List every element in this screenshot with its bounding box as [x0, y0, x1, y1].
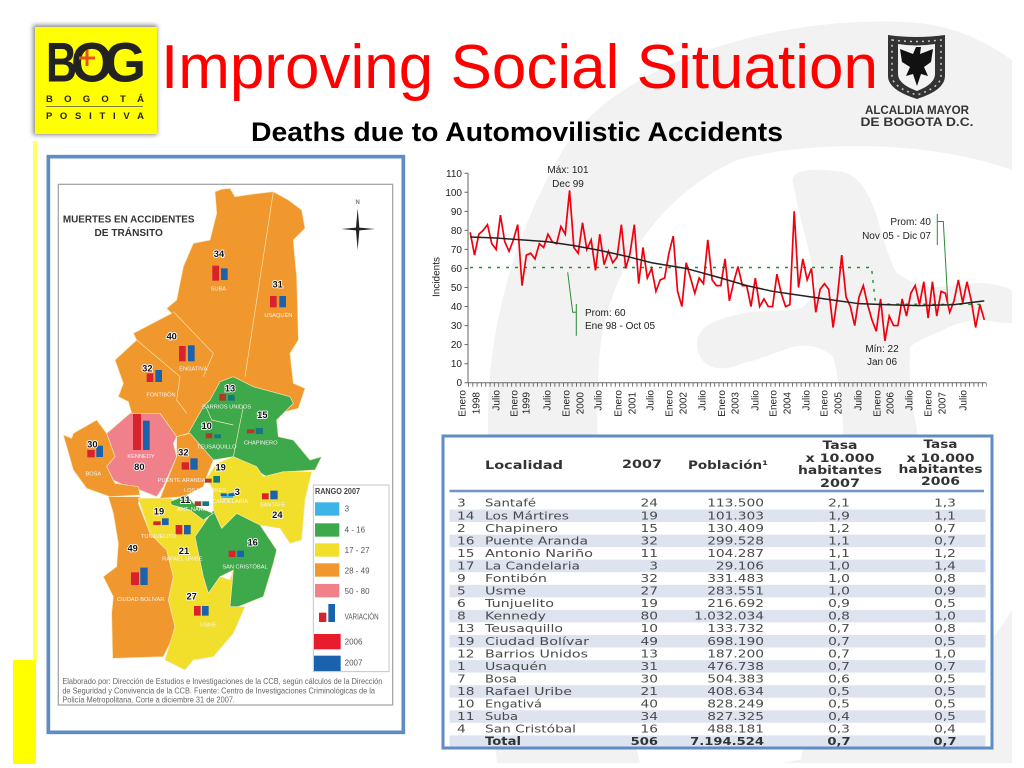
Usaquén: USAQUÉN: [264, 312, 292, 319]
x axis and labels: Julio: [802, 390, 812, 411]
Barrios Unidos: [202, 383, 251, 411]
table rows: ID: 1: [457, 659, 466, 673]
map title: [63, 214, 195, 239]
Engativá: ENGATIVÁ: [179, 366, 208, 373]
table header: x 10.000: [906, 451, 974, 465]
callout: Prom 60: Ene 98 - Oct 05: [585, 321, 655, 332]
Los Mártires: [184, 463, 226, 494]
Antonio Nariño: ANT. NARIÑO: [177, 506, 214, 513]
map legend: 4 - 16: [345, 526, 366, 535]
table header: 2007: [622, 457, 662, 471]
table column: rate 2007: 0,8: [828, 609, 850, 622]
La Candelaria: [212, 487, 248, 505]
table column: rate 2006: 0,5: [934, 596, 956, 610]
Santafé: SANTAFÉ: [260, 501, 286, 508]
x axis and labels: Enero: [614, 390, 624, 417]
left yellow accent strip: [13, 141, 37, 764]
table column: rate 2007: 0,3: [828, 722, 850, 735]
table rows: ID: 12: [457, 647, 474, 660]
Puente Aranda: 32: [178, 448, 189, 458]
table header: x 10.000: [806, 451, 874, 465]
map legend: RANGO 2007: [315, 487, 360, 496]
Engativá: [166, 332, 208, 373]
table column: population: 828.249: [707, 697, 764, 710]
table header: Tasa: [924, 437, 958, 451]
table column: 2007: 32: [641, 571, 658, 585]
table header: [450, 437, 984, 491]
table rows: ID: 15: [457, 546, 474, 560]
Tunjuelito: [141, 506, 176, 540]
Ciudad Bolívar: [117, 543, 164, 603]
table column: 2007: 80: [641, 609, 658, 622]
Tunjuelito: TUNJUELITO: [141, 534, 176, 540]
table rows: ID: 18: [457, 684, 475, 698]
table column: rate 2006: [933, 496, 957, 748]
Usaquén: 31: [272, 279, 283, 289]
Ciudad Bolívar: CIUDAD BOLÍVAR: [117, 596, 164, 603]
table rows: ID: 19: [457, 634, 475, 647]
map of Bogotá localities: [63, 188, 322, 670]
table column: rate 2006: 1,3: [934, 496, 956, 509]
table rows: localities: Santafé: [485, 497, 536, 510]
table column: rate 2006: 0,8: [934, 622, 956, 635]
icon: Bogotá coat of arms: [888, 35, 945, 99]
y axis and labels: 50: [451, 283, 462, 294]
table column: rate 2006: 1,1: [934, 509, 956, 522]
table column: population: 504.383: [707, 672, 764, 685]
table column: rate 2006: 0,7: [934, 534, 956, 547]
table column: 2007: 19: [641, 509, 658, 522]
table column: rate 2007: 0,5: [828, 684, 850, 698]
Los Mártires: 19: [215, 463, 226, 473]
Suba: 34: [214, 249, 225, 259]
table header: Población¹: [688, 458, 768, 472]
Rafael Uribe: RAFAEL URIBE: [162, 556, 203, 562]
table column: rate 2007: 0,6: [828, 672, 850, 685]
table column: rate 2007: 0,7: [828, 634, 850, 647]
table column: rate 2007: 1,1: [828, 546, 850, 560]
table rows: ID: 14: [457, 509, 475, 522]
x axis and labels: Julio: [698, 390, 708, 411]
table column: 2007: 32: [641, 534, 658, 547]
panel: locality table: [443, 436, 992, 748]
Chapinero: 15: [257, 410, 268, 420]
table column: rate 2006: 0,5: [934, 672, 956, 685]
Bosa: BOSA: [85, 471, 101, 477]
x axis and labels: 2002: [678, 392, 690, 414]
x axis and labels: 2000: [576, 392, 586, 414]
table header: 2006: [921, 474, 960, 488]
table column: rate 2007: 1,0: [828, 571, 850, 585]
table rows: ID: 17: [457, 559, 474, 572]
panel: traffic deaths map: [48, 157, 403, 732]
line chart: monthly incidents 1998-2007: [432, 165, 987, 417]
table rows: ID: 13: [457, 622, 474, 635]
table column: rate 2007: 2,1: [828, 496, 850, 509]
table column: population: 113.500: [707, 496, 764, 509]
table rows: localities: [484, 497, 593, 748]
table header: Localidad: [485, 458, 563, 472]
table column: rate 2006: 0,5: [934, 684, 956, 698]
x axis and labels: 2005: [834, 392, 844, 414]
table rows: ID: 11: [457, 709, 474, 723]
table column: rate 2007: 0,9: [828, 596, 850, 610]
Kennedy: KENNEDY: [127, 454, 155, 460]
table column: rate 2006: 1,0: [934, 609, 956, 622]
x axis and labels: 1999: [522, 392, 532, 414]
table rows: ID: 5: [457, 584, 466, 597]
map legend: 50 - 80: [345, 587, 370, 596]
y axis and labels: 10: [451, 359, 462, 370]
Alcaldía Mayor wordmark: [860, 103, 974, 129]
x axis and labels: 1998: [472, 392, 482, 414]
Fontibón: [142, 363, 176, 398]
Suba: SUBA: [211, 286, 226, 292]
Chapinero: CHAPINERO: [244, 441, 278, 447]
Suba: [211, 249, 228, 292]
table rows: ID: [457, 496, 475, 735]
table column: rate 2006: 0,8: [934, 571, 956, 585]
y axis and labels: 0: [456, 378, 462, 389]
table column: rate 2007: 1,0: [828, 584, 850, 597]
table column: 2007: 49: [641, 634, 658, 647]
table column: rate 2007: 1,1: [828, 534, 850, 547]
y axis and labels: Incidents: [432, 257, 442, 297]
table header: habitantes: [898, 462, 983, 476]
table header: 2007: [820, 476, 860, 490]
Santafé: 24: [272, 510, 283, 520]
table column: rate 2007: [827, 496, 851, 748]
table rows: localities: Kennedy: [485, 610, 547, 623]
table column: 2007: 31: [641, 659, 658, 673]
background swirl watermark: [488, 22, 1012, 763]
table column: population: 7.194.524: [690, 735, 764, 748]
map title: MUERTES EN ACCIDENTES: [63, 214, 195, 225]
locality bars and counts: [85, 249, 292, 628]
table rows: localities: Chapinero: [485, 522, 558, 535]
x axis and labels: Julio: [594, 390, 604, 411]
San Cristóbal: SAN CRISTÓBAL: [222, 564, 268, 571]
Rafael Uribe: [162, 525, 203, 562]
Tunjuelito: 19: [154, 506, 164, 516]
x axis and labels: 2006: [886, 392, 896, 414]
x axis and labels: Enero: [820, 390, 830, 417]
table rows: localities: Tunjuelito: [484, 597, 554, 610]
table column: 2007: 16: [641, 722, 658, 735]
table column: population: 133.732: [707, 622, 764, 635]
table column: population: [690, 496, 764, 748]
title: Improving Social Situation: [161, 33, 878, 102]
logo: BOG Bogotá Positiva: [33, 25, 157, 135]
map source note: Elaborado por: Dirección de Estudios e Investigaciones de la CCB, según cálculos de la Dirección: [62, 677, 382, 686]
table column: rate 2007: 1,9: [828, 509, 850, 522]
Rafael Uribe: 21: [179, 546, 189, 556]
table rows: localities: Puente Aranda: [485, 534, 588, 547]
callout: Max: Máx: 101: [547, 165, 589, 176]
table column: 2007: 506: [631, 735, 658, 748]
Teusaquillo: 10: [201, 421, 212, 431]
Kennedy: 80: [134, 462, 145, 472]
table column: rate 2006: 0,5: [934, 634, 956, 647]
table header: Tasa: [822, 438, 858, 452]
callout: Max: Dec 99: [552, 179, 584, 190]
y axis and labels: 110: [446, 169, 462, 180]
map source note: de Seguridad y Convivencia de la CCB. Fuente: Centro de Investigaciones Criminológicas de la: [62, 686, 376, 695]
table column: 2007: 24: [641, 496, 658, 509]
table column: 2007: 13: [641, 647, 658, 660]
Fontibón: 32: [142, 363, 153, 373]
table column: rate 2007: 1,2: [828, 521, 850, 534]
Barrios Unidos: BARRIOS UNIDOS: [202, 405, 251, 411]
Usme: 27: [186, 592, 197, 602]
x axis and labels: Julio: [492, 390, 502, 411]
trend line: [470, 237, 984, 306]
table rows: ID: 9: [457, 571, 466, 585]
logo: BOG Bogotá Positiva: G: [104, 30, 146, 94]
row shading: [450, 510, 986, 746]
table column: rate 2007: 0,7: [827, 735, 851, 748]
map legend: 3: [345, 505, 350, 514]
table column: population: 698.190: [707, 634, 764, 647]
map legend: 2007: [345, 658, 363, 667]
table rows: localities: Total: [485, 734, 521, 748]
x axis and labels: Enero: [664, 390, 676, 417]
callout: Prom 60: Prom: 60: [585, 308, 626, 319]
table column: rate 2006: 0,7: [933, 735, 957, 748]
table rows: ID: 3: [457, 496, 466, 509]
table rows: localities: Ciudad Bolívar: [485, 635, 590, 648]
table rows: ID: 7: [457, 672, 466, 685]
Antonio Nariño: 11: [180, 495, 190, 505]
table rows: ID: 16: [457, 534, 475, 547]
table column: 2007: 34: [641, 709, 658, 723]
callout: Min: Mín: 22: [865, 344, 899, 355]
Bosa: 30: [87, 439, 98, 449]
Alcaldía Mayor wordmark: DE BOGOTA D.C.: [860, 115, 974, 129]
Usme: USME: [200, 622, 217, 628]
logo: BOG Bogotá Positiva: B: [46, 30, 77, 94]
table column: rate 2007: 0,5: [828, 697, 850, 710]
table column: 2007: 40: [641, 697, 658, 710]
icon: compass rose: N: [355, 200, 360, 206]
period average dashed line: [470, 268, 983, 304]
table rows: localities: La Candelaria: [485, 560, 580, 572]
San Cristóbal: [222, 537, 268, 571]
table rows: localities: Antonio Nariño: [485, 547, 593, 560]
table rows: ID: 10: [457, 697, 475, 710]
Engativá: 40: [166, 332, 177, 342]
Alcaldía Mayor wordmark: ALCALDIA MAYOR: [865, 103, 969, 117]
x axis and labels: Julio: [750, 390, 762, 411]
table rows: localities: Engativá: [485, 698, 542, 710]
table column: 2007: 10: [641, 622, 658, 635]
x axis and labels: Julio: [854, 390, 864, 411]
table header: habitantes: [798, 463, 882, 477]
San Cristóbal: 16: [247, 537, 258, 547]
y axis and labels: [432, 169, 468, 389]
table column: rate 2007: 0,7: [828, 647, 850, 660]
table column: rate 2006: 0,7: [934, 521, 956, 534]
y axis and labels: 90: [451, 207, 462, 218]
table column: 2007: 11: [641, 546, 658, 560]
map source note: [62, 677, 382, 705]
Kennedy: [127, 414, 155, 472]
table column: population: 187.200: [707, 647, 764, 660]
table column: 2007: 27: [641, 584, 658, 597]
x axis and labels: Enero: [510, 390, 520, 417]
callout: Prom 40: Prom: 40: [890, 217, 931, 228]
x axis and labels: Enero: [924, 390, 934, 417]
subtitle: Deaths due to Automovilistic Accidents: [251, 117, 783, 147]
table column: rate 2006: 0,7: [934, 659, 956, 673]
callout: Min: [865, 344, 899, 368]
Teusaquillo: [197, 421, 237, 451]
map legend: 28 - 49: [345, 566, 370, 575]
table column: rate 2007: 0,7: [828, 659, 850, 673]
table rows: localities: Los Mártires: [485, 509, 569, 522]
table rows: localities: Bosa: [485, 672, 517, 685]
Teusaquillo: TEUSAQUILLO: [197, 445, 237, 451]
table column: population: 476.738: [707, 659, 764, 673]
Usme: [186, 592, 217, 628]
table rows: localities: Teusaquillo: [484, 622, 563, 635]
Fontibón: FONTIBÓN: [146, 391, 176, 398]
table column: rate 2006: 0,4: [934, 722, 956, 735]
table column: 2007: 15: [641, 521, 658, 534]
y axis and labels: 70: [451, 245, 462, 256]
table rows: localities: San Cristóbal: [485, 723, 576, 736]
table column: population: 488.181: [707, 722, 764, 735]
table column: rate 2006: 1,2: [934, 546, 956, 560]
y axis and labels: 100: [445, 188, 462, 199]
Chapinero: [244, 410, 278, 447]
table column: population: 1.032.034: [694, 609, 764, 622]
x axis and labels: Julio: [542, 390, 554, 411]
x axis and labels: Enero: [872, 390, 884, 417]
x axis and labels: [458, 383, 987, 417]
Puente Aranda: [158, 448, 206, 484]
Santafé: [260, 491, 286, 520]
table rows: ID: 8: [457, 609, 466, 622]
table column: rate 2007: 0,7: [828, 622, 850, 635]
logo: BOG Bogotá Positiva: B O G O T Á: [46, 94, 144, 105]
map legend: VARIACIÓN: [345, 612, 379, 621]
Los Mártires: LOS MÁRTIRES: [184, 487, 226, 494]
map legend: 2006: [345, 637, 363, 646]
table column: 2007: 21: [641, 684, 658, 698]
table column: rate 2006: 1,4: [934, 559, 956, 572]
x axis and labels: Julio: [958, 390, 970, 411]
table column: population: 299.528: [707, 534, 764, 547]
table column: 2007: 30: [641, 672, 658, 685]
table column: rate 2006: 0,5: [934, 709, 956, 723]
x axis and labels: 2001: [628, 392, 638, 414]
y axis and labels: 30: [451, 321, 462, 332]
logo: BOG Bogotá Positiva: O: [71, 30, 113, 94]
x axis and labels: 2004: [782, 392, 794, 414]
table column: rate 2006: 0,9: [934, 584, 956, 597]
table column: rate 2006: 0,5: [934, 697, 956, 710]
x axis and labels: 2003: [730, 392, 742, 414]
callout: Min: Jan 06: [867, 357, 897, 368]
y axis and labels: 80: [451, 226, 462, 237]
Usaquén: [264, 279, 292, 319]
x axis and labels: Enero: [562, 390, 572, 417]
callout: Prom 40: [862, 214, 948, 305]
table rows: ID: 2: [457, 521, 466, 534]
y axis and labels: 60: [451, 264, 462, 275]
x axis and labels: Enero: [717, 390, 728, 417]
table column: population: 216.692: [707, 596, 764, 610]
Bosa: [85, 439, 103, 477]
table column: population: 101.303: [707, 509, 764, 522]
table column: 2007: 3: [649, 559, 658, 572]
x axis and labels: Enero: [458, 390, 468, 417]
table column: population: 331.483: [707, 571, 764, 585]
table rows: ID: 4: [457, 722, 466, 735]
logo: BOG Bogotá Positiva: P O S I T I V A: [46, 111, 144, 122]
La Candelaria: CANDELARIA: [212, 499, 248, 505]
table column: 2007: [631, 496, 658, 748]
map legend: 17 - 27: [345, 546, 370, 555]
table column: population: 130.409: [707, 521, 764, 534]
table column: population: 29.106: [716, 559, 764, 572]
x axis and labels: Julio: [904, 390, 916, 411]
table column: population: 283.551: [707, 584, 764, 597]
La Candelaria: 3: [235, 487, 240, 497]
table rows: localities: Barrios Unidos: [485, 647, 588, 660]
Puente Aranda: PUENTE ARANDA: [158, 478, 206, 484]
table column: rate 2006: 1,0: [934, 647, 956, 660]
table rows: localities: Suba: [485, 710, 518, 723]
table rows: ID: 6: [457, 596, 466, 610]
table column: rate 2007: 0,4: [828, 709, 850, 723]
y axis and labels: 20: [451, 340, 462, 351]
Ciudad Bolívar: 49: [127, 543, 138, 553]
table column: population: 408.634: [707, 684, 764, 698]
icon: compass rose: [341, 200, 375, 250]
x axis and labels: Enero: [768, 390, 780, 417]
table rows: localities: Fontibón: [485, 572, 547, 585]
callout: Prom 40: Nov 05 - Dic 07: [862, 231, 931, 242]
Barrios Unidos: 13: [225, 383, 235, 393]
table column: rate 2007: 1,0: [828, 559, 850, 572]
table rows: localities: Usme: [485, 585, 526, 598]
table column: population: 104.287: [707, 546, 764, 560]
callout: Max: [547, 165, 589, 190]
Antonio Nariño: [177, 495, 214, 513]
table column: population: 827.325: [707, 709, 764, 723]
callout: Prom 60: [568, 272, 655, 336]
table column: 2007: 19: [641, 596, 658, 610]
x axis and labels: Julio: [646, 390, 656, 411]
x axis and labels: 2007: [938, 392, 948, 414]
table rows: localities: Usaquén: [485, 660, 547, 673]
table rows: localities: Rafael Uribe: [485, 685, 572, 698]
map legend: [313, 485, 389, 672]
monthly incidents series: [470, 190, 984, 341]
map title: DE TRÁNSITO: [94, 226, 163, 239]
map source note: Policía Metropolitana. Corte a diciembre 31 de 2007.: [62, 696, 235, 705]
y axis and labels: 40: [451, 302, 462, 313]
